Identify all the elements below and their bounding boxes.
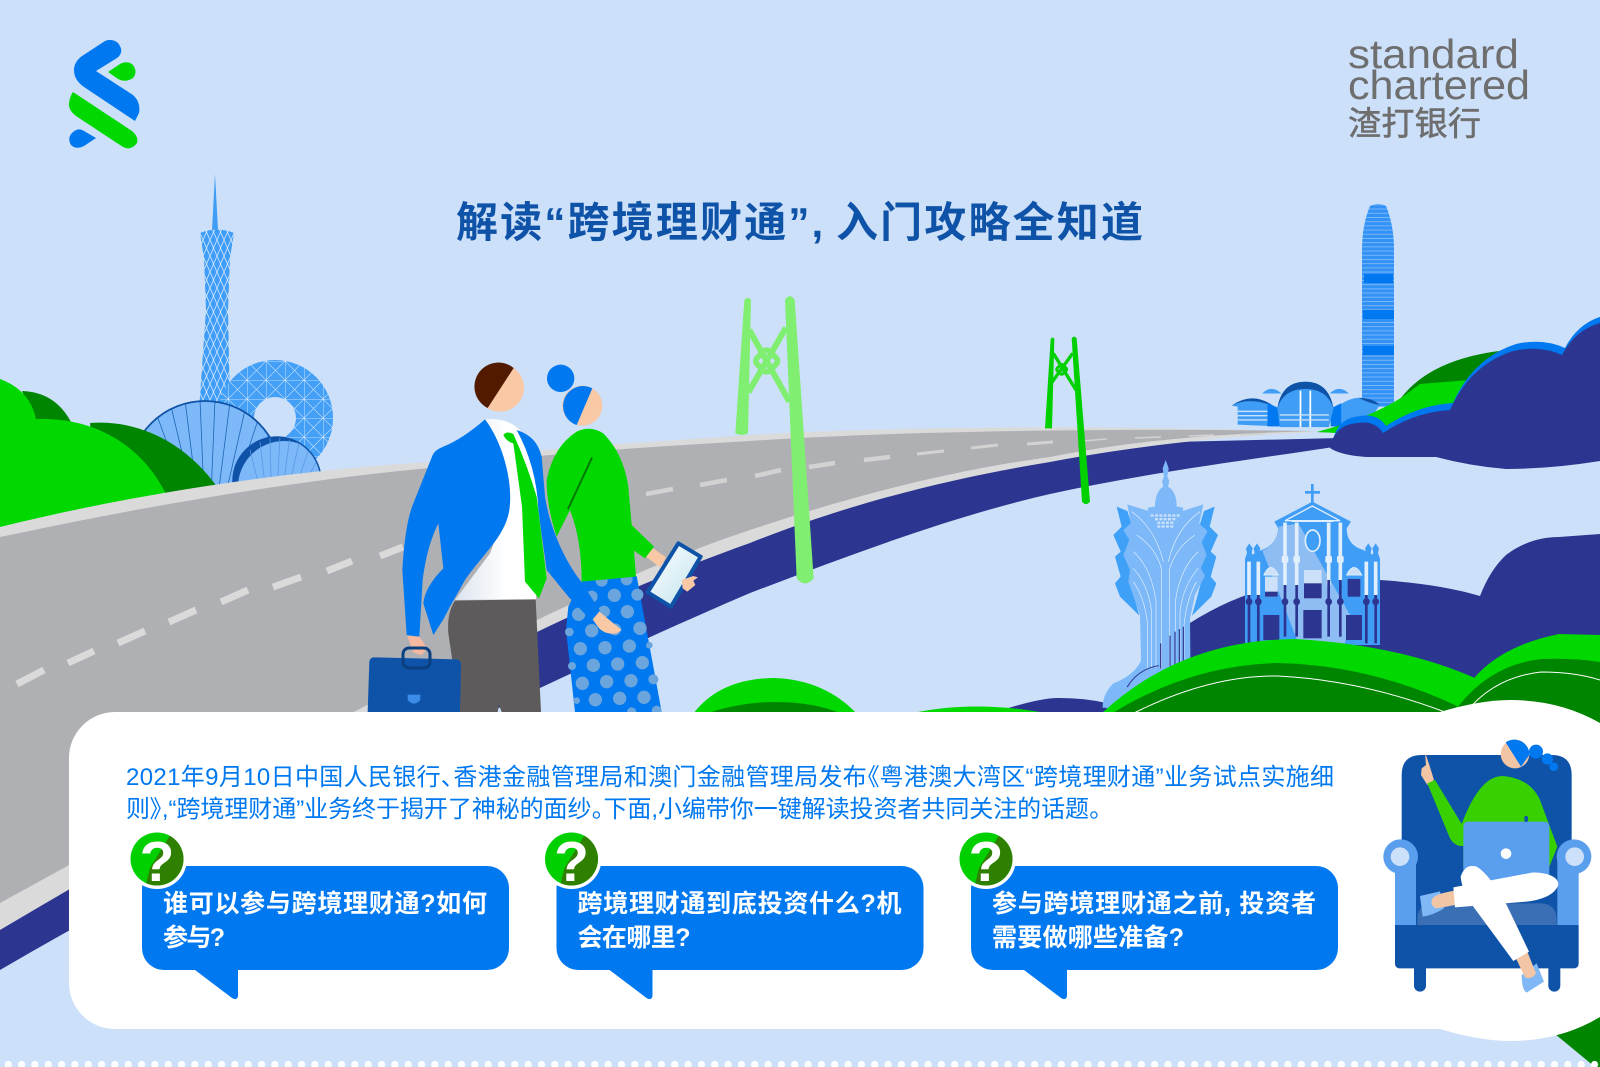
icon: Standard Chartered logo mark [69,40,139,148]
question bubble 2: 跨境理财通到底投资什么?机 [578,890,902,918]
landmark: Guangzhou domes [144,400,321,485]
white trousers [1453,866,1558,961]
landmark: Grand Lisboa, Macau [1103,460,1218,708]
question bubble 3 [956,829,1338,999]
question bubble 1: 谁可以参与跨境理财通?如何 [163,889,487,918]
woman head and hair [1501,740,1558,771]
brand wordmark: chartered [1348,62,1530,108]
landmark: Canton Tower [199,174,234,410]
foreground green hills [693,634,1600,1067]
woman sweater [1427,776,1557,867]
left foot and shoe [1420,891,1455,917]
title: 解读“跨境理财通”, 入门攻略全知道 [456,199,1143,246]
panel: white blob behind armchair [1440,700,1600,1041]
question bubble 3: ? [969,830,1003,894]
landmark: Guangzhou Circle building [217,360,333,476]
shirt [455,419,540,600]
question bubble 2: 会在哪里? [578,924,690,952]
intro text [126,764,1334,823]
man head [474,363,524,412]
bridge tower: near [735,296,814,583]
bottom dotted strip [0,1060,1600,1067]
man hand with briefcase [407,636,427,655]
armchair [1383,755,1591,992]
question bubble 1: 参与? [163,923,225,952]
road with shoulder and water [0,427,1340,970]
bridge tower: far [1045,337,1090,504]
skirt [565,573,662,717]
question bubble 3: 参与跨境理财通之前, 投资者 [992,889,1316,918]
trousers [448,599,541,712]
brand wordmark [1348,31,1530,142]
right foot and shoe [1516,952,1544,993]
laptop [1463,816,1549,882]
brand wordmark: standard [1348,31,1519,77]
question bubble 3: 需要做哪些准备? [992,924,1184,952]
tablet [648,543,701,607]
illustration: woman with laptop in armchair [1383,740,1591,993]
woman forearm [646,547,666,567]
figure: man and woman looking down the road [368,363,701,717]
question bubble 1 [127,829,509,999]
intro text: 则》,“跨境理财通”业务终于揭开了神秘的面纱。下面,小编带你一键解读投资者共同关注的话题。 [126,796,1101,823]
tie [503,433,547,598]
intro text: 2021年9月10日中国人民银行、香港金融管理局和澳门金融管理局发布《粤港澳大湾区“跨境理财通”业务试点实施细 [126,764,1334,791]
brand wordmark: 渣打银行 [1348,105,1481,142]
man right hand [593,612,622,634]
woman top [547,429,654,582]
landmark: Hong Kong Convention Centre [1232,382,1380,427]
left bushes [0,379,218,535]
question bubble 2: ? [554,830,589,894]
woman head [547,365,602,426]
briefcase [368,648,461,712]
right hills: far [1317,316,1600,469]
landmark: Hong Kong IFC tower [1362,204,1394,407]
jacket left [402,419,510,637]
question bubble 2 [542,829,924,999]
question bubble 1: ? [140,830,174,894]
jacket right and sleeve [517,430,600,620]
right hills: near water [990,534,1600,720]
panel: white information card [69,712,1549,1029]
landmark: Ruins of St Paul's, Macau [1245,484,1380,645]
woman raised hand [1421,752,1434,785]
